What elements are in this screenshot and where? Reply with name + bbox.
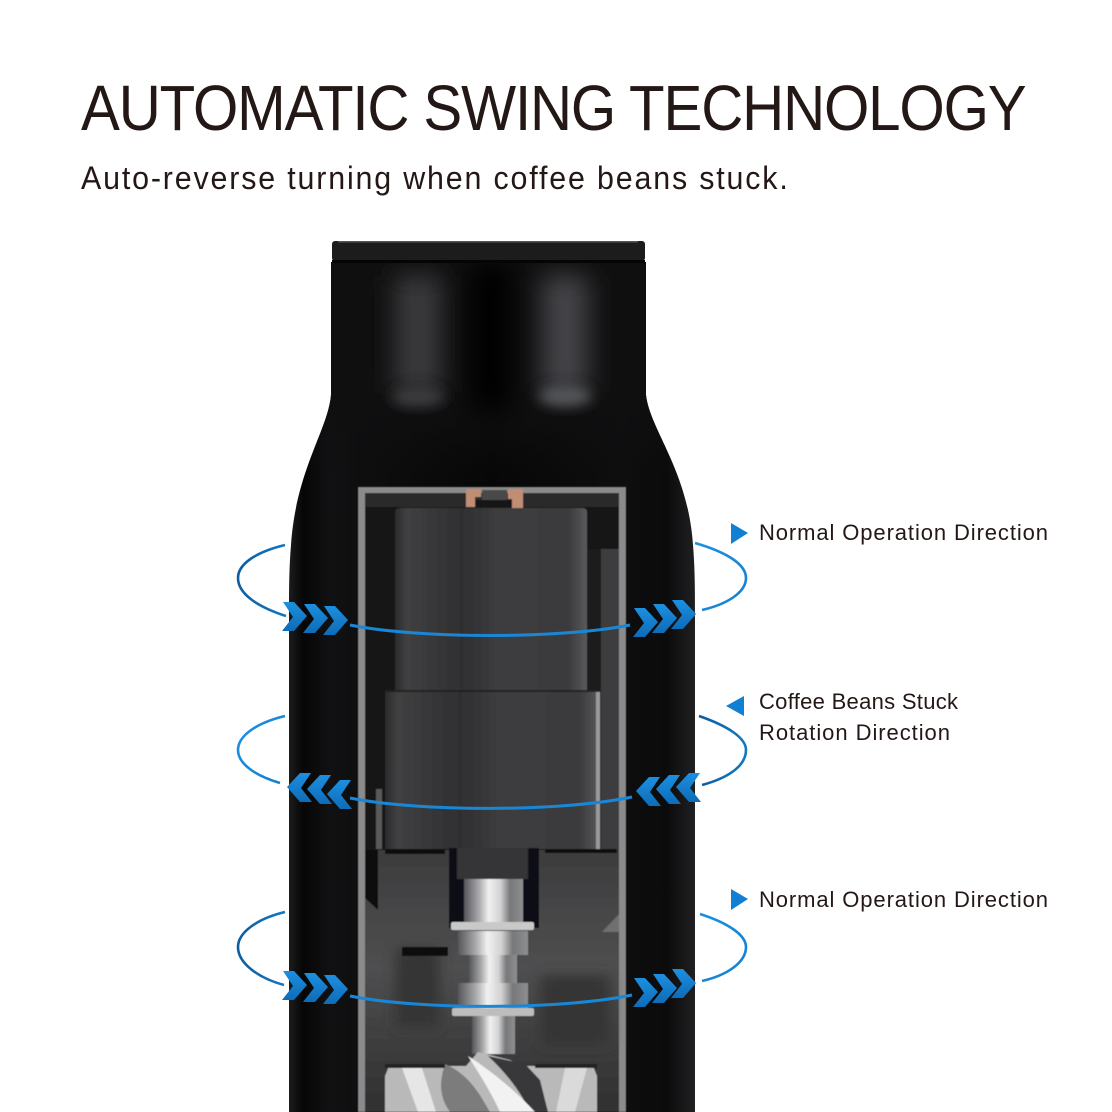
neck shading [310, 263, 672, 460]
back right arc [700, 914, 746, 981]
grinder body [289, 262, 695, 1112]
back left arc [238, 912, 285, 985]
rotation ring: top [238, 543, 746, 637]
burr [385, 1052, 597, 1112]
copper contacts [466, 489, 523, 510]
chevrons right [636, 773, 701, 806]
side bracket [601, 549, 619, 850]
shaft and collar [449, 848, 539, 1054]
cutaway window [358, 487, 626, 1112]
back right arc [695, 543, 746, 610]
rotation ring: bottom [238, 912, 746, 1007]
grinder product cutaway [280, 241, 700, 1112]
front arc [350, 995, 632, 1006]
legend: normal operation direction lower: Normal Operation Direction [759, 887, 1048, 912]
motor upper [395, 508, 587, 691]
legend: coffee beans stuck rotation direction: Coffee Beans Stuck [759, 689, 959, 714]
back left arc [238, 716, 285, 783]
chevrons left [282, 971, 348, 1004]
legend: normal operation direction: Normal Operation Direction [759, 520, 1048, 545]
chevrons right [633, 969, 696, 1007]
chevrons right [633, 600, 696, 637]
front arc [350, 797, 632, 808]
back right arc [699, 716, 746, 785]
chevrons left [282, 602, 348, 635]
lid [332, 241, 645, 263]
legend: coffee beans stuck rotation direction: Rotation Direction [759, 720, 950, 745]
back left arc [238, 545, 286, 616]
lower chamber [365, 850, 619, 1112]
motor lower [385, 691, 600, 849]
legend: coffee beans stuck rotation direction [726, 689, 959, 745]
chevrons left [287, 773, 352, 809]
rotation ring: middle [238, 716, 746, 809]
front arc [350, 625, 630, 636]
title: AUTOMATIC SWING TECHNOLOGY [81, 73, 1027, 144]
subtitle: Auto-reverse turning when coffee beans stuck. [81, 160, 788, 196]
